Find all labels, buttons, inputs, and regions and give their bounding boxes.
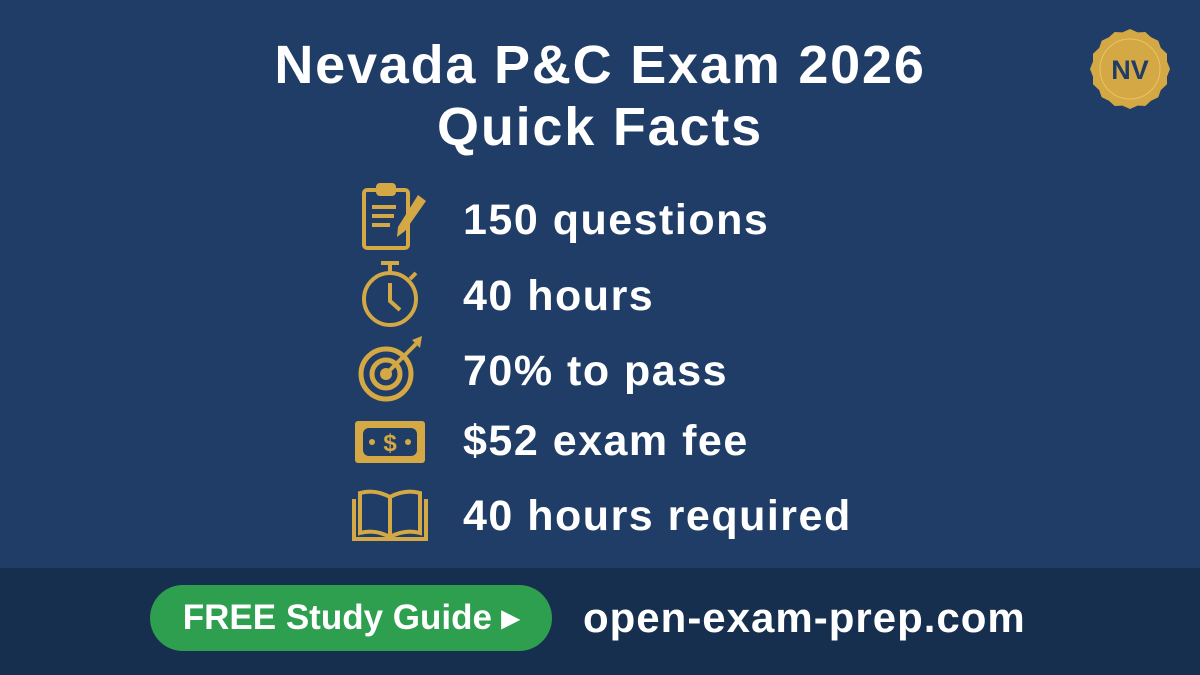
text: fee: $52 exam fee: [463, 417, 749, 465]
text: study hours: 40 hours required: [463, 492, 852, 540]
icon: target: [358, 336, 422, 402]
footer bar: [0, 568, 1200, 675]
text: pass: 70% to pass: [463, 347, 728, 395]
icon: clipboard: [362, 183, 426, 250]
badge: NV: [1090, 29, 1170, 109]
title: [274, 35, 926, 157]
icon: money: [355, 421, 425, 463]
button: free study guide: [150, 585, 552, 651]
icon: book: [352, 490, 428, 541]
badge: NV: NV: [1111, 55, 1149, 85]
icon: stopwatch: [362, 261, 418, 327]
button: free study guide: FREE Study Guide ▸: [183, 598, 519, 637]
title: Nevada P&C Exam 2026: [274, 35, 926, 95]
icon: money: $: [383, 430, 397, 457]
text: hours: 40 hours: [463, 272, 654, 320]
url: open-exam-prep.com: [583, 594, 1026, 641]
title: Quick Facts: [437, 97, 763, 157]
text: questions: 150 questions: [463, 196, 769, 244]
